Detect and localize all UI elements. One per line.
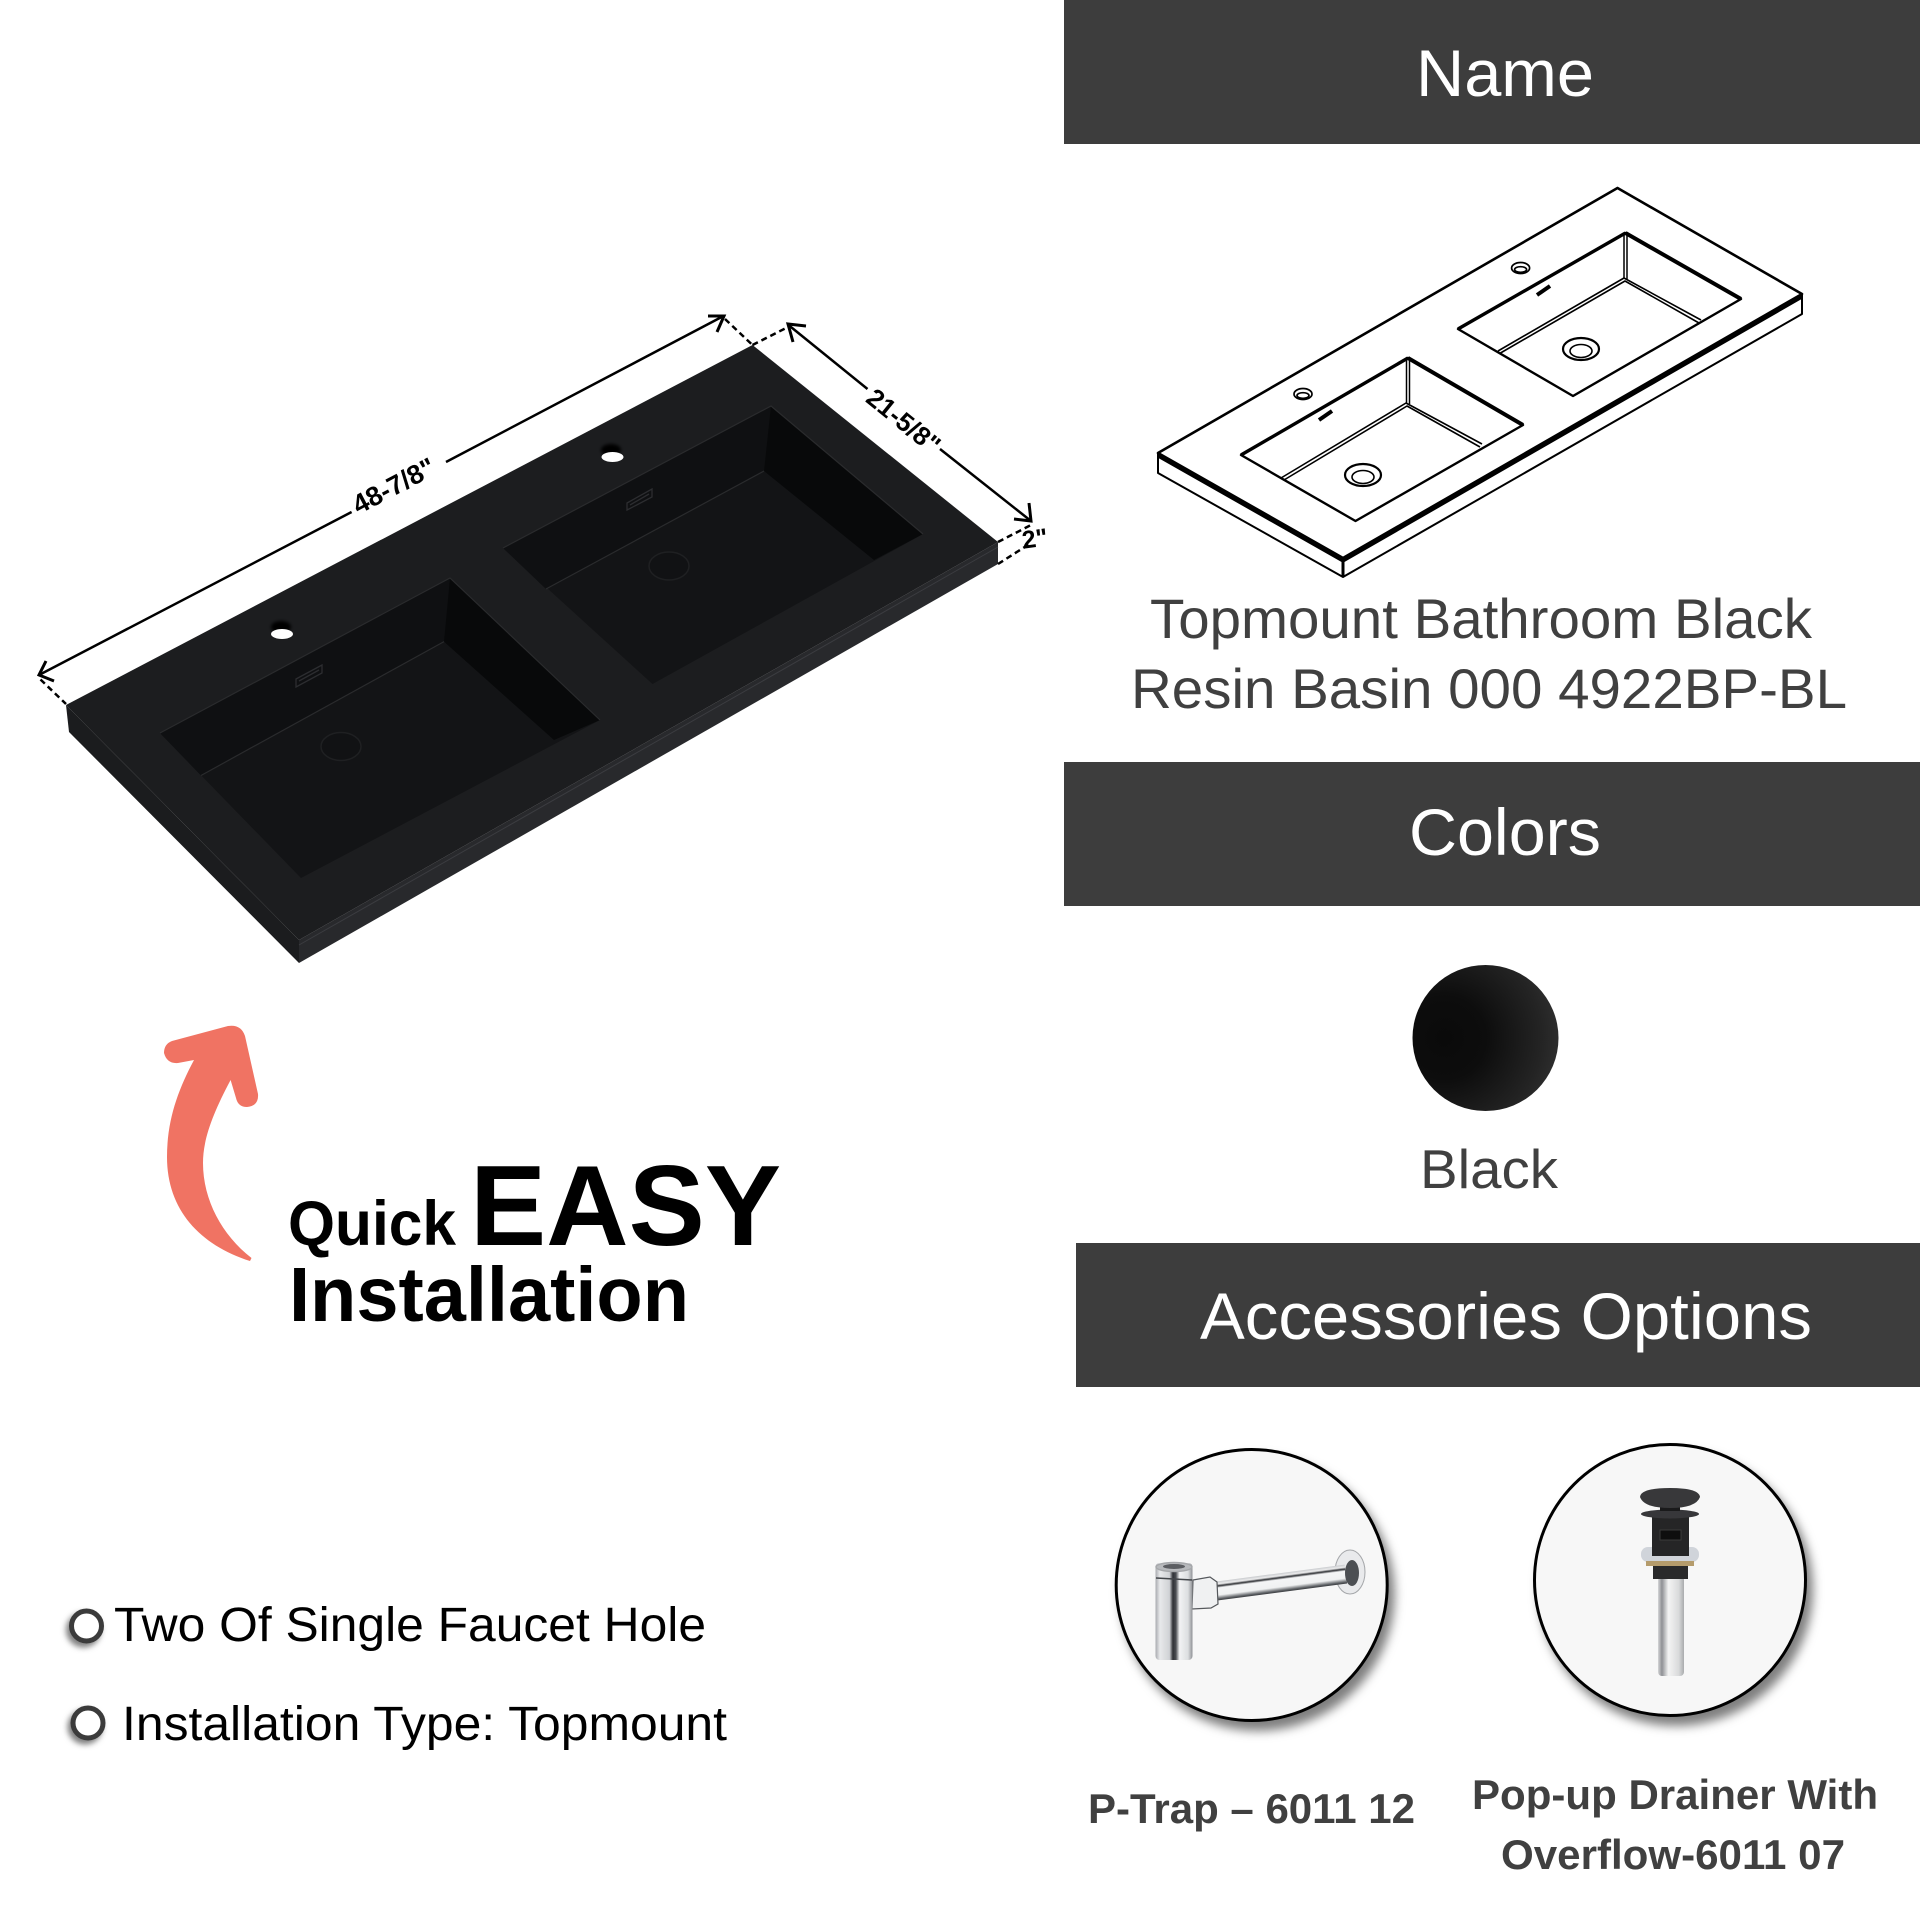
panel: product render with dimensions [39, 316, 1050, 963]
heading: quick easy installation [288, 1143, 781, 1338]
product name text: Topmount Bathroom Black [1150, 587, 1813, 650]
panel: name header [1064, 0, 1920, 144]
right faucet hole [601, 444, 624, 462]
heading: quick easy installation: Quick [288, 1189, 457, 1259]
line drawing of basin [1158, 188, 1802, 577]
left overflow [296, 665, 322, 687]
panel: accessories header: Accessories Options [1200, 1279, 1812, 1353]
panel: colors header: Colors [1409, 795, 1601, 869]
accessory label: pop-up drainer: Overflow-6011 07 [1501, 1831, 1845, 1878]
left drain [1345, 464, 1381, 486]
right overflow [1537, 286, 1550, 295]
accessory: pop-up drain [1534, 1444, 1806, 1716]
left drain [321, 732, 361, 760]
circle frame [1534, 1444, 1806, 1716]
right faucet hole [1512, 262, 1530, 274]
accessory label: pop-up drainer [1472, 1771, 1878, 1878]
heading: quick easy installation: Installation [289, 1252, 689, 1338]
accessory: p-trap [1116, 1450, 1387, 1720]
dimension label: depth: 21-5/8" [861, 382, 947, 460]
panel: accessories header [1076, 1243, 1920, 1387]
right overflow [627, 489, 652, 510]
panel: name header: Name [1416, 36, 1594, 110]
accessory label: pop-up drainer: Pop-up Drainer With [1472, 1771, 1878, 1818]
dimension arrows [39, 316, 1031, 704]
icon: curved coral arrow [164, 1026, 258, 1261]
bullet [73, 1708, 103, 1738]
feature: installation type: Installation Type: Topmount [122, 1698, 727, 1751]
dimension label: width: 48-7/8" [347, 452, 440, 520]
dimension label: height: 2" [1020, 523, 1050, 555]
heading: quick easy installation: EASY [470, 1143, 781, 1270]
chrome p-trap [1156, 1550, 1365, 1660]
right drain [649, 552, 689, 580]
left overflow [1319, 411, 1332, 420]
feature: faucet hole: Two Of Single Faucet Hole [114, 1599, 706, 1652]
accessory label: p-trap: P-Trap – 6011 12 [1088, 1785, 1415, 1832]
bullet [72, 1611, 102, 1641]
right drain [1563, 338, 1599, 360]
color swatch: black [1412, 965, 1558, 1111]
black double basin render [66, 345, 998, 963]
drain assembly [1640, 1488, 1700, 1676]
product name text: Resin Basin 000 4922BP-BL [1131, 657, 1847, 720]
left faucet hole [1294, 388, 1312, 400]
left faucet hole [271, 621, 293, 639]
panel: colors header [1064, 762, 1920, 906]
color label: Black [1420, 1138, 1559, 1200]
product name text [1131, 587, 1847, 720]
circle frame [1116, 1450, 1387, 1720]
